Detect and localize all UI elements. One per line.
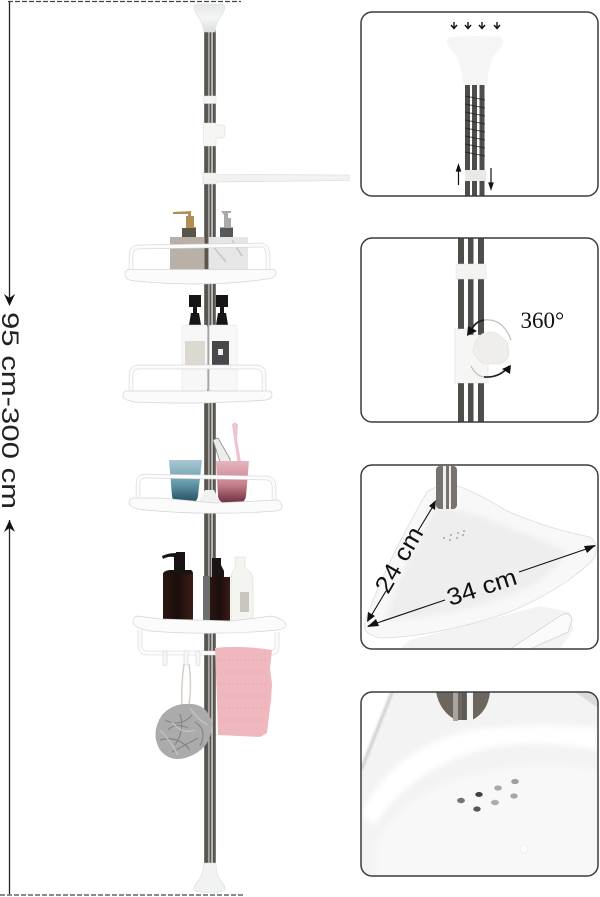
shelf rail <box>131 245 268 270</box>
swing arm <box>203 173 349 184</box>
bottom end cap <box>194 863 225 892</box>
locking clip <box>204 123 225 146</box>
shelf 4 with bottles, hooks, towel and loofah <box>133 552 286 759</box>
pressure arrows <box>451 22 500 28</box>
shelf plate <box>129 498 282 513</box>
grey loofah <box>155 704 212 759</box>
drain holes <box>457 779 519 812</box>
panel: spring-loaded top cap <box>447 22 503 196</box>
pole stripes <box>458 238 484 422</box>
panel: drainage holes close-up <box>361 692 598 876</box>
bottle caps <box>189 295 228 325</box>
shelf plate <box>125 270 276 284</box>
collar <box>456 264 486 279</box>
telescopic pole <box>194 4 349 892</box>
short amber bottle <box>203 558 230 622</box>
top end cap <box>194 4 225 32</box>
shelf plate <box>364 486 596 638</box>
panel: shelf dimensions 24 cm by 34 cm <box>361 465 598 649</box>
down arrow <box>489 168 493 189</box>
collar <box>465 170 486 181</box>
34 cm arrow <box>367 545 596 627</box>
shelf 2 with white bottles <box>123 295 272 403</box>
shelf 1 with soap dispensers <box>125 211 276 284</box>
moulding nub <box>520 845 528 853</box>
top right corner <box>576 692 598 708</box>
upper collar <box>204 96 216 104</box>
shelf rail <box>131 367 264 391</box>
blue cup <box>169 460 202 503</box>
lower shelf glimpse <box>400 606 573 649</box>
shelf 3 with cups and toothbrush <box>129 423 282 513</box>
up arrow <box>456 165 460 185</box>
drain holes <box>443 530 465 541</box>
left white bottle <box>182 325 208 391</box>
shelf plate <box>123 391 272 403</box>
towel bar and hooks <box>140 630 277 666</box>
24 cm arrow: 24 cm <box>370 522 429 598</box>
loofah strap <box>182 664 190 705</box>
centre bracket <box>198 490 220 503</box>
pole stripes <box>465 85 484 196</box>
pole hole <box>436 692 490 721</box>
right white bottle <box>210 325 237 391</box>
panel border 2 <box>361 238 598 422</box>
panel border 1 <box>361 12 598 196</box>
tall amber bottle <box>162 552 193 621</box>
34 cm arrow: 34 cm <box>444 564 520 612</box>
rotation arrows <box>484 320 511 340</box>
pink towel <box>215 647 272 737</box>
height dimension: 95 cm-300 cm <box>0 2 243 895</box>
24 cm arrow <box>367 500 436 622</box>
spread cap <box>447 36 503 85</box>
pink cup <box>216 461 249 503</box>
spring <box>465 96 485 156</box>
basin <box>375 765 598 876</box>
pole end <box>436 466 457 509</box>
knob <box>473 332 509 364</box>
white bottle <box>231 557 253 622</box>
panel border 3 <box>361 465 598 649</box>
shelf rail <box>138 476 274 500</box>
left shelf edge <box>362 693 390 762</box>
label 360 degrees: 360° <box>520 308 564 333</box>
panel: 360 degree rotating clip <box>454 238 564 422</box>
beige dispenser <box>170 211 204 270</box>
shelf plate <box>133 616 286 633</box>
panel border 4 <box>361 692 598 876</box>
curved rim <box>361 725 598 825</box>
clip body <box>455 329 488 383</box>
marble dispenser <box>209 211 248 270</box>
toothbrush <box>232 423 241 462</box>
toothpaste tube <box>213 438 230 462</box>
